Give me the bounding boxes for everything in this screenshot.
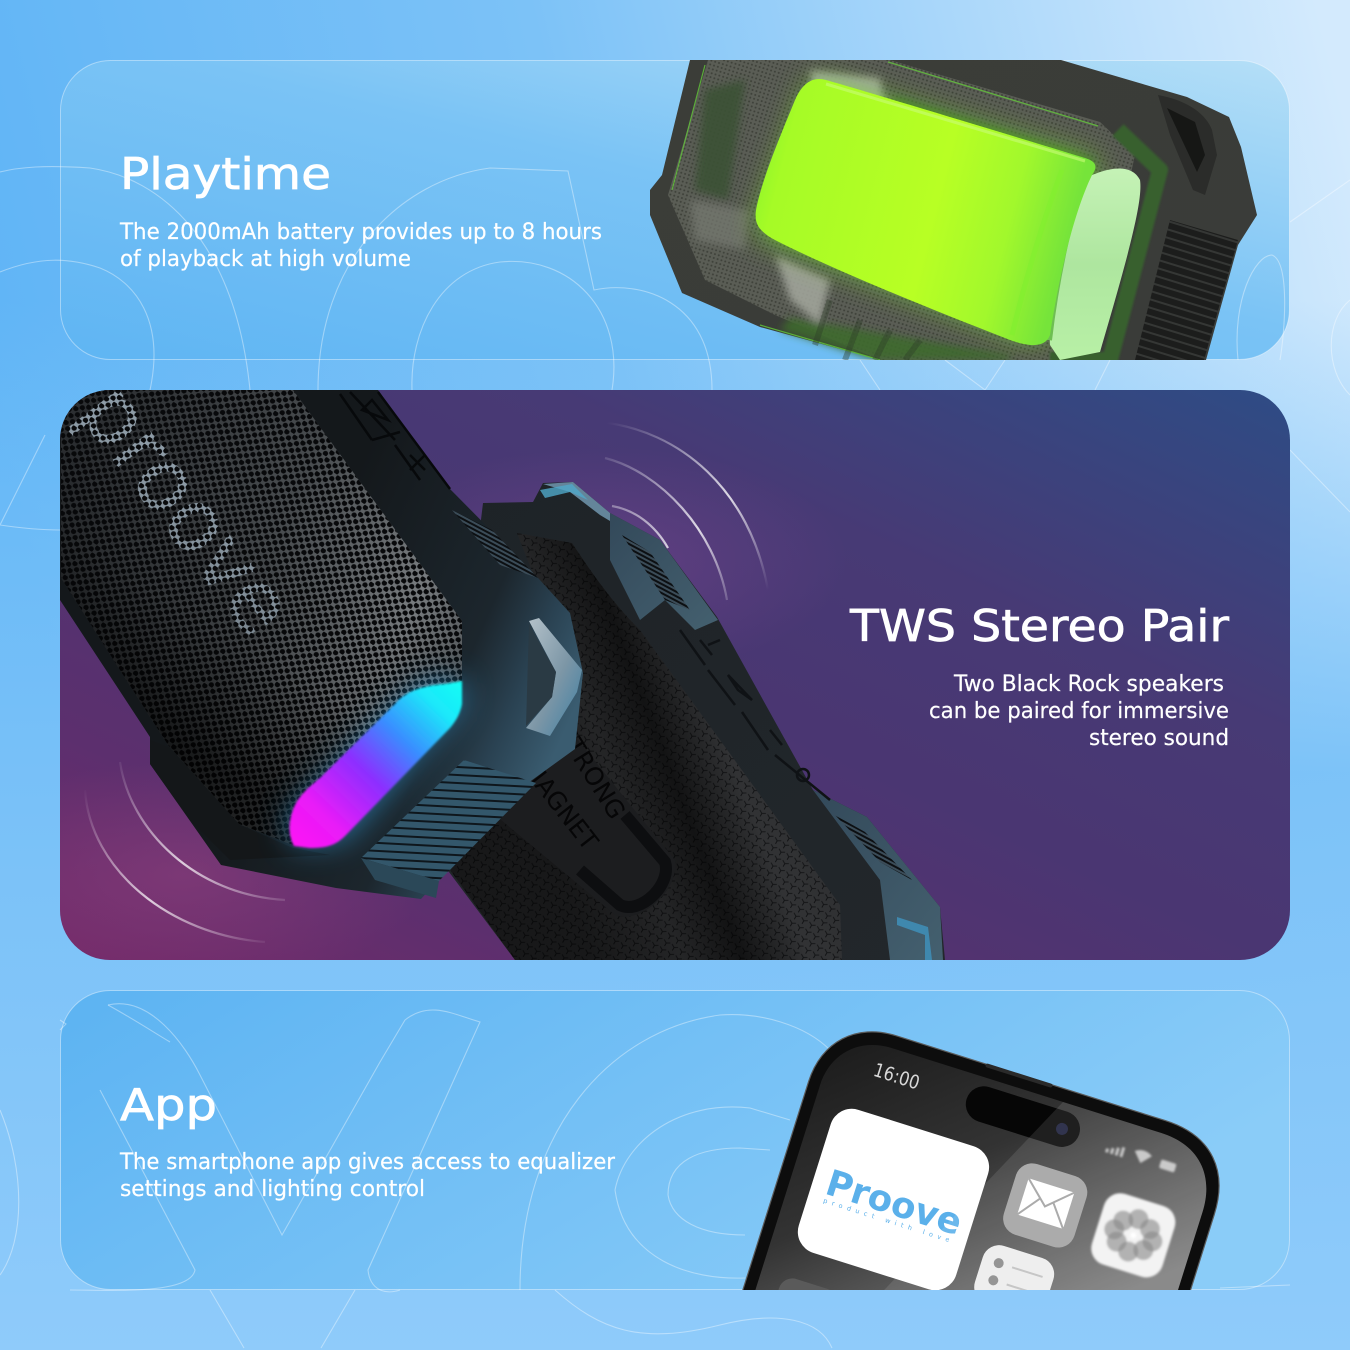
bracket dark edge <box>150 764 328 858</box>
text: TWS description: Two Black Rock speakers <box>953 672 1224 697</box>
text: App description: settings and lighting control <box>120 1177 425 1202</box>
phone body <box>740 1032 1219 1301</box>
status time: 16:00 <box>871 1059 922 1094</box>
heading: App: App <box>120 1080 217 1131</box>
app tile: Proove: product with love <box>822 1197 951 1244</box>
ribbed grip <box>1135 220 1238 360</box>
grill mesh <box>61 365 462 845</box>
strap latch <box>1158 95 1217 195</box>
magnet label <box>495 718 675 917</box>
text: TWS description <box>929 672 1229 751</box>
text: Playtime description: of playback at high volume <box>120 247 411 272</box>
green glow <box>760 85 1095 340</box>
screen glare <box>875 1102 1206 1300</box>
app tile: reminders <box>970 1241 1058 1320</box>
app tile: Proove <box>792 1103 995 1296</box>
heading: Playtime: Playtime <box>120 149 331 200</box>
grill logo text: proove <box>61 365 314 653</box>
background outline letters <box>0 1004 1290 1348</box>
front speaker frame <box>60 390 583 899</box>
text: Playtime description <box>119 220 602 272</box>
background outline letters <box>0 167 1350 530</box>
side buttons <box>340 392 450 489</box>
app tile: Proove: Proove <box>821 1163 967 1244</box>
pale green LED pill <box>1050 168 1140 360</box>
back speaker frame <box>440 482 945 960</box>
magnet label: MAGNET <box>516 755 604 856</box>
sound waves bottom left <box>85 762 285 942</box>
text: TWS description: can be paired for immersive <box>929 699 1229 724</box>
front camera <box>1056 1122 1068 1135</box>
phone screen <box>753 1045 1206 1300</box>
button strip <box>680 630 830 800</box>
RGB LED bar <box>290 681 462 848</box>
text: TWS description: stereo sound <box>1089 726 1229 751</box>
app tile: lower left <box>771 1275 840 1331</box>
corner logo plate <box>452 510 538 578</box>
magnet label: STRONG <box>551 720 631 824</box>
panel: App <box>0 990 1290 1348</box>
speaker inner mesh shell <box>668 60 1135 360</box>
text: Playtime description: The 2000mAh battery provides up to 8 hours <box>119 220 602 245</box>
speaker with glowing battery <box>650 60 1257 360</box>
speaker translucent body <box>650 60 1257 360</box>
earpiece slit <box>985 1063 1053 1088</box>
glowing battery block <box>756 79 1095 345</box>
app tile: mail <box>999 1159 1092 1252</box>
front speaker <box>60 365 583 899</box>
heading: TWS Stereo Pair: TWS Stereo Pair <box>849 601 1230 652</box>
app tile: photos <box>1087 1189 1180 1282</box>
dynamic island <box>966 1086 1080 1147</box>
strap latch <box>526 618 582 736</box>
back speaker <box>440 482 945 960</box>
phone <box>742 1031 1220 1290</box>
green frame around pill <box>1050 130 1160 360</box>
status icons <box>1104 1146 1178 1174</box>
LED glow <box>289 681 462 845</box>
ribbed grip <box>361 760 536 881</box>
text: App description <box>119 1150 616 1202</box>
sound waves top right <box>600 422 768 600</box>
top lug highlight <box>540 484 588 500</box>
panel: Playtime <box>0 60 1350 530</box>
text: App description: The smartphone app gives access to equalizer <box>119 1150 616 1175</box>
panel: TWS Stereo Pair <box>60 365 1290 960</box>
textured rubber back <box>450 533 842 960</box>
